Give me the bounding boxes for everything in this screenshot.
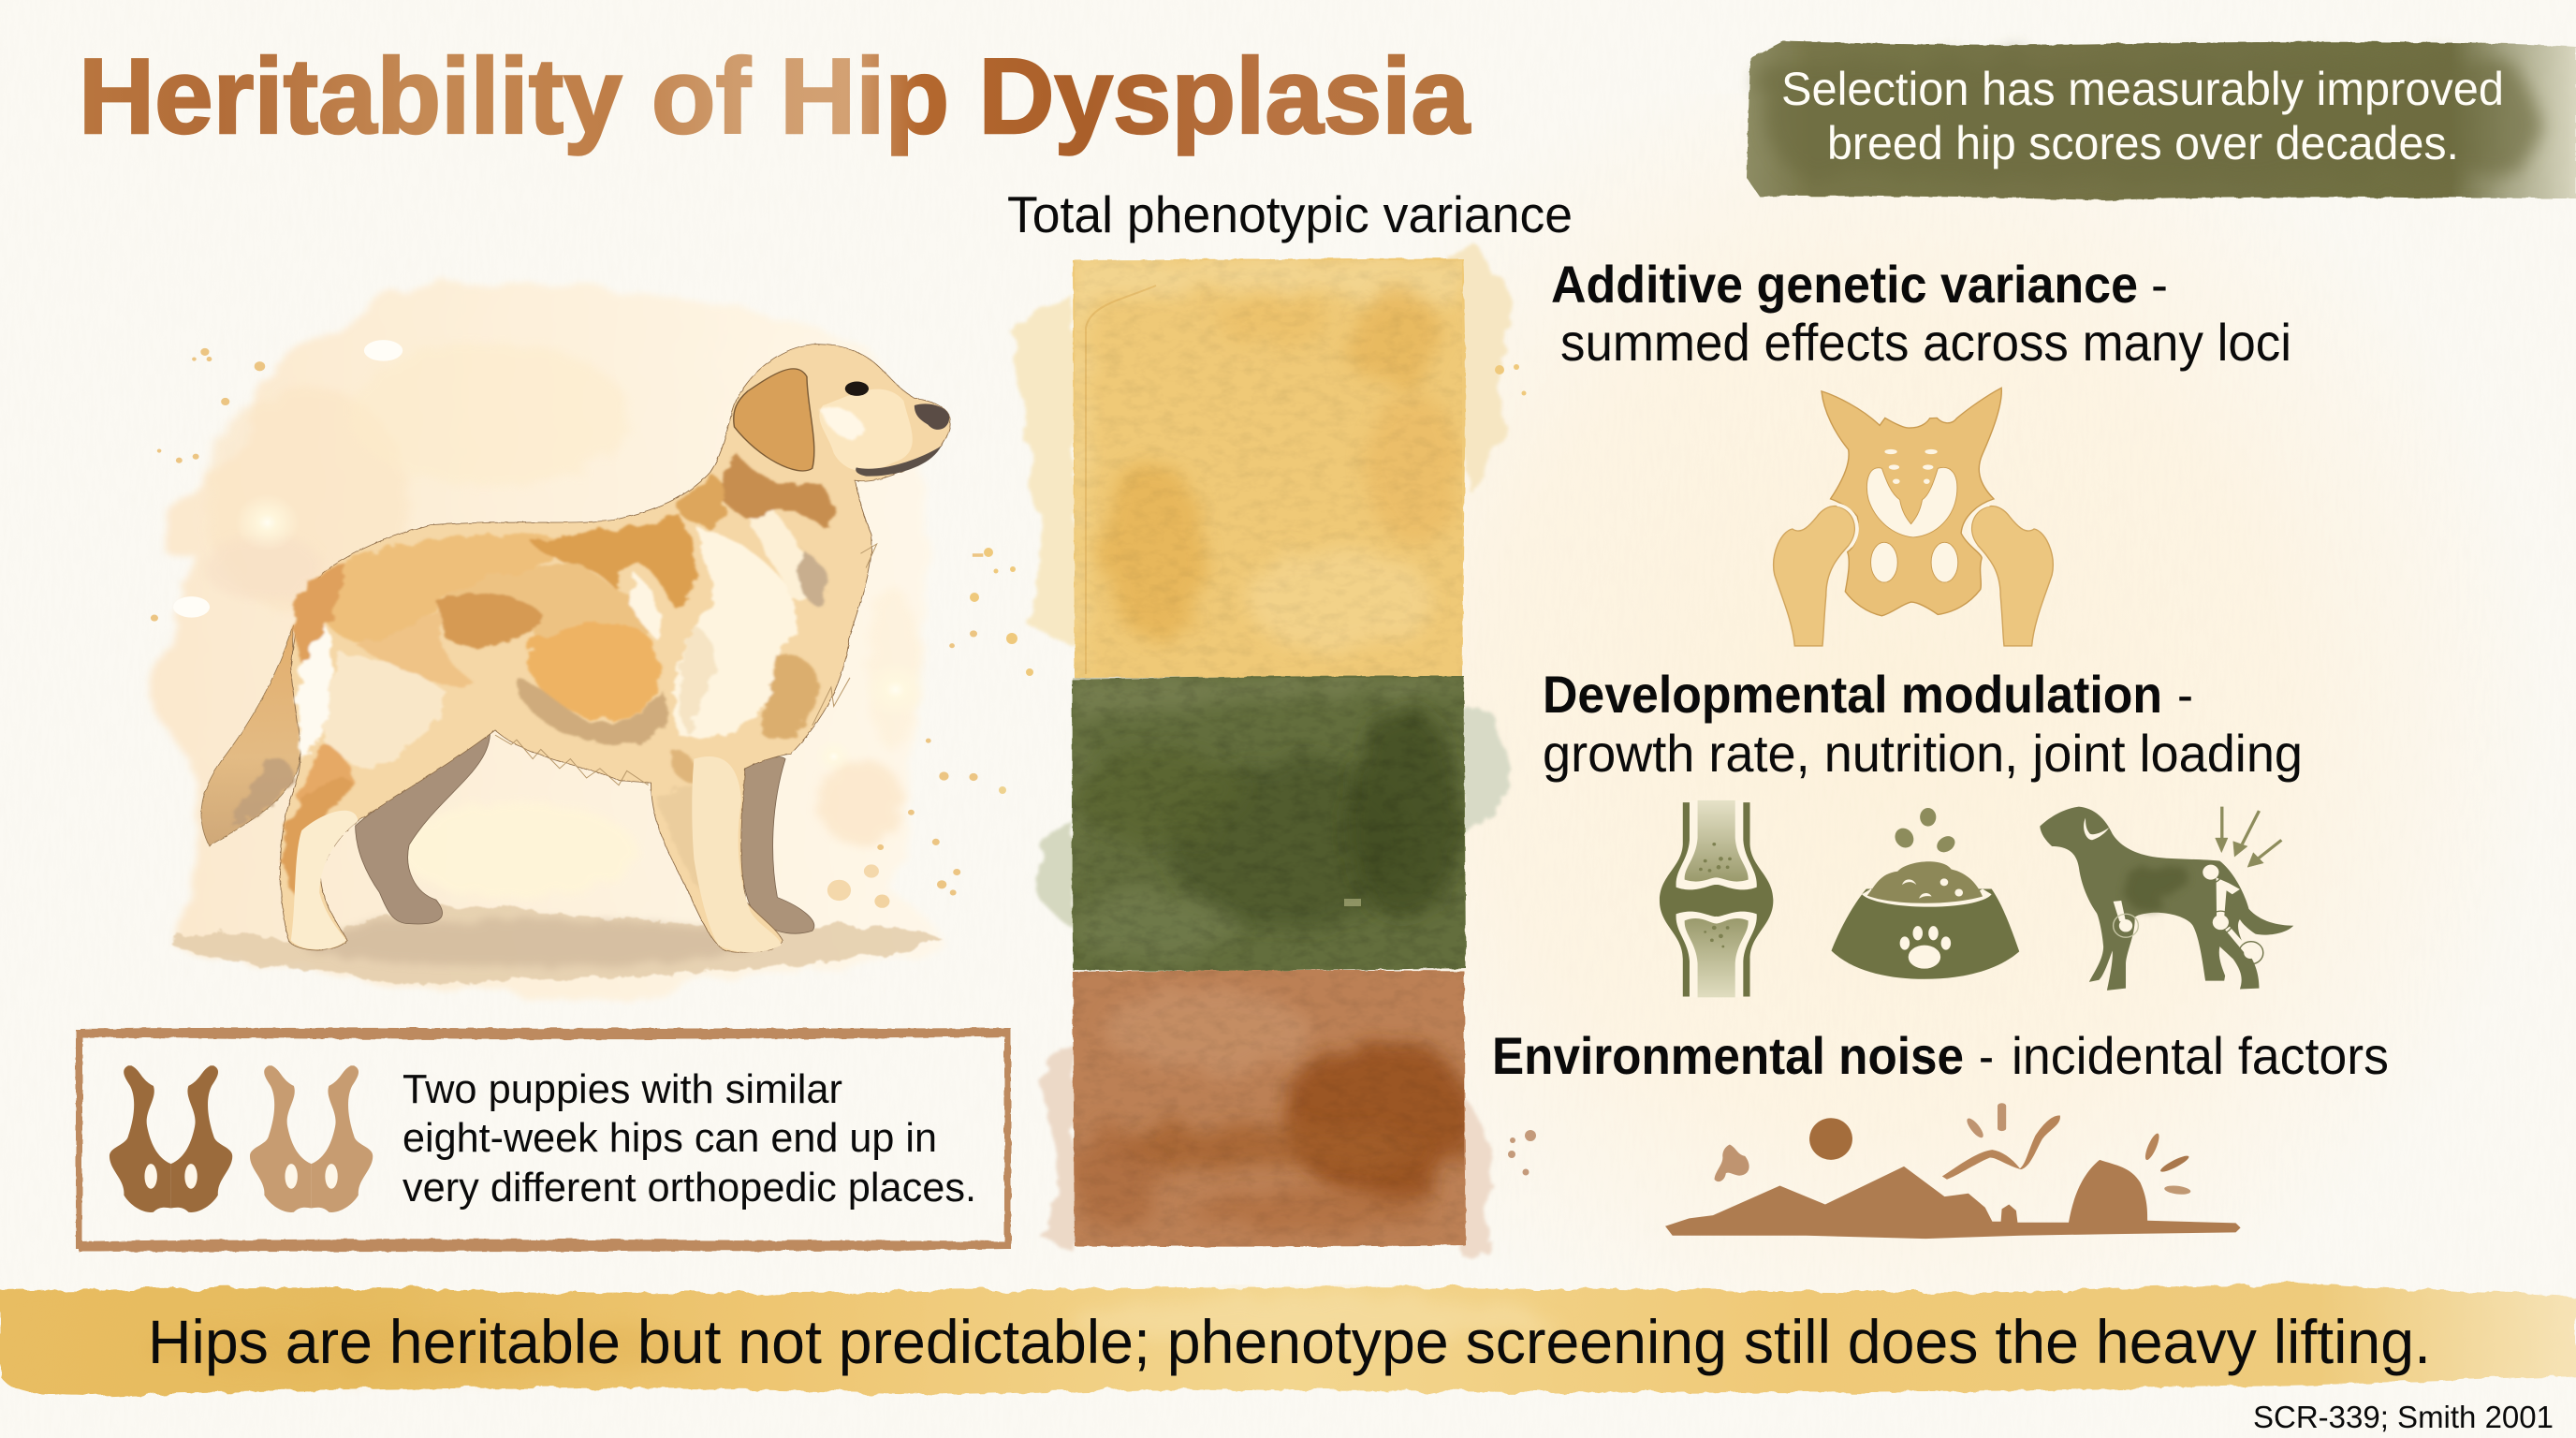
segment: developmental (green) <box>1067 676 1466 971</box>
caption text: eight-week hips can end up in <box>402 1115 937 1161</box>
callout text: breed hip scores over decades. <box>1827 117 2459 169</box>
dog body <box>280 345 950 952</box>
ground shadow core <box>301 919 754 967</box>
heading: environmental noise: - <box>1979 1026 1994 1085</box>
caption box: two puppies <box>76 1028 1011 1252</box>
far fore leg <box>739 757 814 933</box>
heading: developmental modulation: - <box>2177 665 2193 724</box>
icons: development factors <box>1660 800 2293 997</box>
heading: environmental noise: incidental factors <box>2012 1026 2389 1085</box>
takeaway banner <box>0 1283 2576 1397</box>
caption text: Two puppies with similar <box>402 1066 842 1112</box>
callout text <box>1781 63 2504 169</box>
caption text: very different orthopedic places. <box>402 1165 976 1211</box>
splatter dots <box>970 364 1536 1176</box>
callout: selection improved hip scores <box>1747 41 2576 200</box>
near leg pale <box>692 756 781 952</box>
heading: environmental noise: Environmental noise <box>1492 1026 1964 1085</box>
icon: joint <box>1660 800 1773 997</box>
far hind leg <box>356 726 490 924</box>
load arrows <box>2216 807 2281 867</box>
icon: food bowl <box>1831 808 2019 979</box>
illustration: golden retriever <box>151 280 983 998</box>
segment: environmental (brown) <box>1072 970 1474 1247</box>
icon: dog with joint loading <box>2040 807 2293 990</box>
heading: additive genetic variance: - <box>2151 255 2168 314</box>
segment: additive genetic (yellow) <box>1073 258 1466 678</box>
heading: additive genetic variance: summed effects across many loci <box>1560 313 2291 372</box>
watercolor wash behind dog <box>151 280 943 998</box>
heading: developmental modulation <box>1543 665 2303 783</box>
near hind leg pale <box>291 811 359 949</box>
variance stack <box>970 245 1536 1255</box>
heading: environmental noise <box>1492 1026 2389 1085</box>
icon: pelvis <box>1774 388 2053 646</box>
frame <box>76 1028 1011 1252</box>
title: Heritability of Hip Dysplasia <box>79 37 1471 156</box>
icon: environmental landscape <box>1665 1103 2241 1239</box>
fur fringes <box>495 544 877 785</box>
heading: developmental modulation: Developmental modulation <box>1543 665 2162 724</box>
coat patches <box>232 453 834 902</box>
callout text: Selection has measurably improved <box>1781 63 2504 115</box>
tail <box>201 625 300 845</box>
head markings <box>734 369 949 477</box>
heading: additive genetic variance <box>1551 255 2291 372</box>
caption text <box>402 1066 976 1211</box>
ground shadow <box>168 906 942 984</box>
paint splatters <box>151 348 983 908</box>
icon: light puppy hip <box>250 1065 373 1212</box>
source citation: SCR-339; Smith 2001 <box>2253 1400 2554 1434</box>
banner text: Hips are heritable but not predictable; phenotype screening still does the heavy lifting. <box>148 1307 2431 1376</box>
watercolor halos <box>1009 245 1515 1255</box>
heading: additive genetic variance: Additive genetic variance <box>1551 255 2138 314</box>
axis label: Total phenotypic variance <box>1007 185 1573 243</box>
heading: developmental modulation: growth rate, nutrition, joint loading <box>1543 724 2303 783</box>
icon: dark puppy hip <box>110 1065 232 1212</box>
